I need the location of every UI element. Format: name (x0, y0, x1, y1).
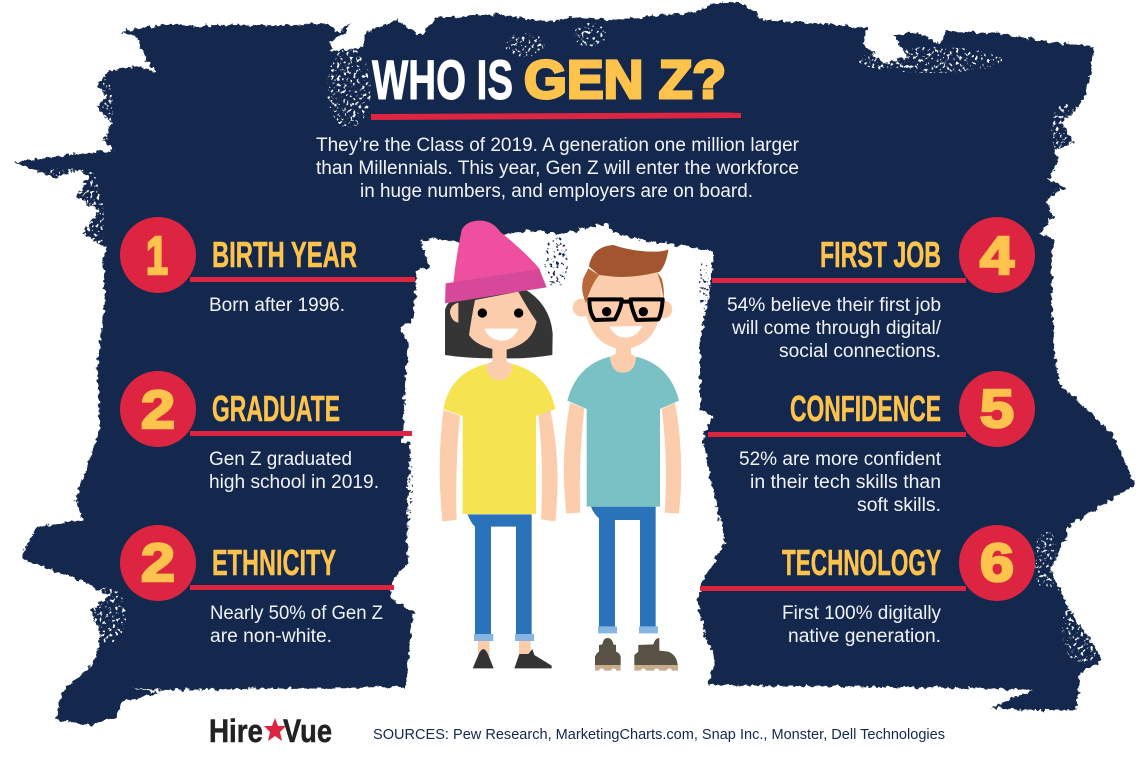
item 4: first job: will come through digital/ (731, 318, 942, 339)
item 3: ethnicity: 2 (141, 533, 175, 593)
HireVue logo: Hire (209, 713, 263, 749)
item 5: confidence: in their tech skills than (750, 472, 941, 493)
intro text: They’re the Class of 2019. A generation one million larger (316, 135, 800, 156)
item 3: ethnicity (120, 525, 394, 647)
title: GEN Z? (524, 50, 726, 110)
item 5: confidence: 52% are more confident (739, 449, 942, 470)
character: boy with glasses (564, 245, 681, 671)
intro text: than Millennials. This year, Gen Z will enter the workforce (316, 158, 799, 179)
item 2: graduate: 2 (141, 380, 175, 440)
title: WHO IS (372, 48, 513, 111)
item 6: technology (700, 525, 1035, 647)
item 3: ethnicity: are non-white. (210, 626, 332, 647)
item 2: graduate: Gen Z graduated (209, 449, 352, 470)
item 5: confidence (708, 371, 1035, 516)
item 3: ethnicity: Nearly 50% of Gen Z (210, 603, 383, 624)
item 6: technology: First 100% digitally (782, 603, 941, 624)
item 5: confidence: CONFIDENCE (790, 388, 941, 429)
item 4: first job: social connections. (779, 341, 941, 362)
sources: SOURCES: Pew Research, MarketingCharts.com, Snap Inc., Monster, Dell Technologies (373, 727, 945, 743)
item 4: first job: FIRST JOB (820, 234, 941, 275)
item 2: graduate: GRADUATE (212, 388, 340, 429)
item 3: ethnicity: ETHNICITY (212, 542, 336, 583)
title (371, 48, 741, 120)
item 4: first job: 4 (980, 226, 1014, 286)
HireVue logo (209, 713, 332, 749)
item 4: first job (712, 217, 1035, 362)
item 2: graduate (120, 371, 412, 493)
item 6: technology: native generation. (788, 626, 941, 647)
HireVue logo: Vue (283, 713, 332, 749)
intro text: in huge numbers, and employers are on board. (360, 181, 753, 202)
item 6: technology: 6 (980, 533, 1014, 593)
item 1: birth year: Born after 1996. (209, 295, 345, 316)
item 1: birth year: 1 (146, 226, 168, 286)
item 5: confidence: 5 (980, 379, 1014, 439)
intro text (316, 135, 800, 202)
item 5: confidence: soft skills. (857, 495, 941, 516)
item 1: birth year (120, 217, 415, 316)
item 4: first job: 54% believe their first job (727, 295, 941, 316)
white brush-stroke panel behind characters (390, 223, 725, 700)
item 2: graduate: high school in 2019. (209, 472, 379, 493)
character: girl with pink beanie (440, 221, 558, 668)
item 1: birth year: BIRTH YEAR (212, 234, 357, 275)
item 6: technology: TECHNOLOGY (782, 542, 941, 583)
